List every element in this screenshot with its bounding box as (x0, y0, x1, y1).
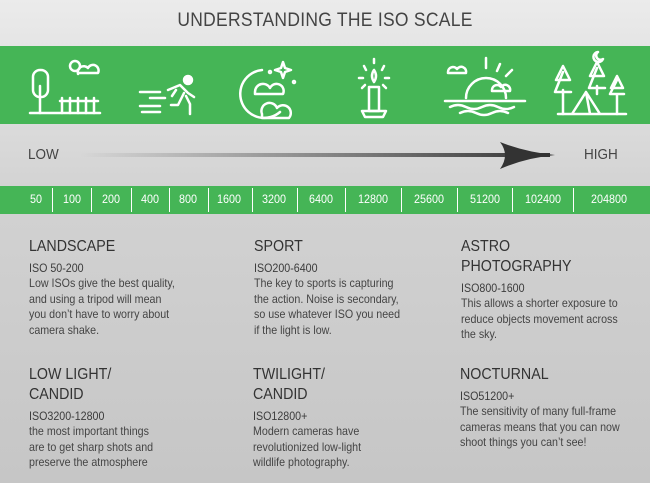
green icon band (0, 46, 650, 124)
panel: sport (254, 238, 400, 336)
high label: HIGH (584, 146, 618, 163)
text: 204800 (591, 192, 627, 206)
panel: twilight (253, 366, 361, 469)
panel: twilight: CANDID (253, 386, 308, 403)
icon: candle (359, 59, 389, 117)
panel: nocturnal: ISO51200+ (460, 389, 514, 403)
panel: astro: ASTRO (461, 238, 510, 255)
panel: low light: preserve the atmosphere (29, 455, 148, 469)
panel: sport: The key to sports is capturing (254, 276, 394, 290)
panel: nocturnal (460, 366, 620, 449)
panel: sport: ISO200-6400 (254, 261, 318, 275)
text: 1600 (217, 192, 241, 206)
text: 6400 (309, 192, 333, 206)
panel: nocturnal: NOCTURNAL (460, 366, 549, 383)
text: 12800 (358, 192, 388, 206)
panel: landscape: and using a tripod will mean (29, 292, 161, 306)
panel: sport: if the light is low. (254, 322, 332, 336)
panel: nocturnal: cameras means that you can now (460, 420, 620, 434)
text: 100 (63, 192, 81, 206)
panel: twilight: revolutionized low-light (253, 440, 361, 454)
low label: LOW (28, 146, 59, 163)
panel: twilight: wildlife photography. (253, 455, 350, 469)
panel: twilight: TWILIGHT/ (253, 366, 325, 383)
icon: runner (140, 76, 194, 114)
panel: astro: reduce objects movement across (461, 312, 618, 326)
panel: low light: ISO3200-12800 (29, 409, 104, 423)
panel: astro: the sky. (461, 327, 497, 341)
panel: nocturnal: shoot things you can’t see! (460, 435, 586, 449)
panel: landscape: ISO 50-200 (29, 261, 84, 275)
panel: landscape (29, 238, 175, 336)
panel: astro: This allows a shorter exposure to (461, 296, 618, 310)
panel: astro: PHOTOGRAPHY (461, 258, 572, 275)
title: UNDERSTANDING THE ISO SCALE (177, 10, 473, 31)
panel: landscape: you don’t have to worry about (29, 307, 169, 321)
icon: camping (555, 52, 626, 114)
panel: low light: are to get sharp shots and (29, 440, 153, 454)
text: 200 (102, 192, 120, 206)
panel: landscape: LANDSCAPE (29, 238, 115, 255)
panel: nocturnal: The sensitivity of many full-frame (460, 404, 616, 418)
text: 102400 (525, 192, 561, 206)
panel: twilight: ISO12800+ (253, 409, 307, 423)
panel: landscape: Low ISOs give the best quality, (29, 276, 175, 290)
arrow (106, 142, 555, 169)
text: 3200 (262, 192, 286, 206)
panel: sport: so use whatever ISO you need (254, 307, 400, 321)
icon: sunset (445, 58, 525, 115)
panel: low light: CANDID (29, 386, 84, 403)
text: 400 (141, 192, 159, 206)
text: 51200 (470, 192, 500, 206)
panel: astro (461, 238, 618, 341)
panel: low light: LOW LIGHT/ (29, 366, 111, 383)
ISO number strip (0, 186, 650, 214)
panel: landscape: camera shake. (29, 322, 99, 336)
icon: landscape (30, 61, 100, 113)
panel: low light: the most important things (29, 424, 149, 438)
panel: twilight: Modern cameras have (253, 424, 359, 438)
panel: sport: SPORT (254, 238, 303, 255)
text: 50 (30, 192, 42, 206)
panel: sport: the action. Noise is secondary, (254, 292, 399, 306)
text: 25600 (414, 192, 444, 206)
icon: moon and clouds (240, 62, 295, 118)
text: 800 (179, 192, 197, 206)
panel: low light (29, 366, 153, 469)
panel: astro: ISO800-1600 (461, 281, 525, 295)
